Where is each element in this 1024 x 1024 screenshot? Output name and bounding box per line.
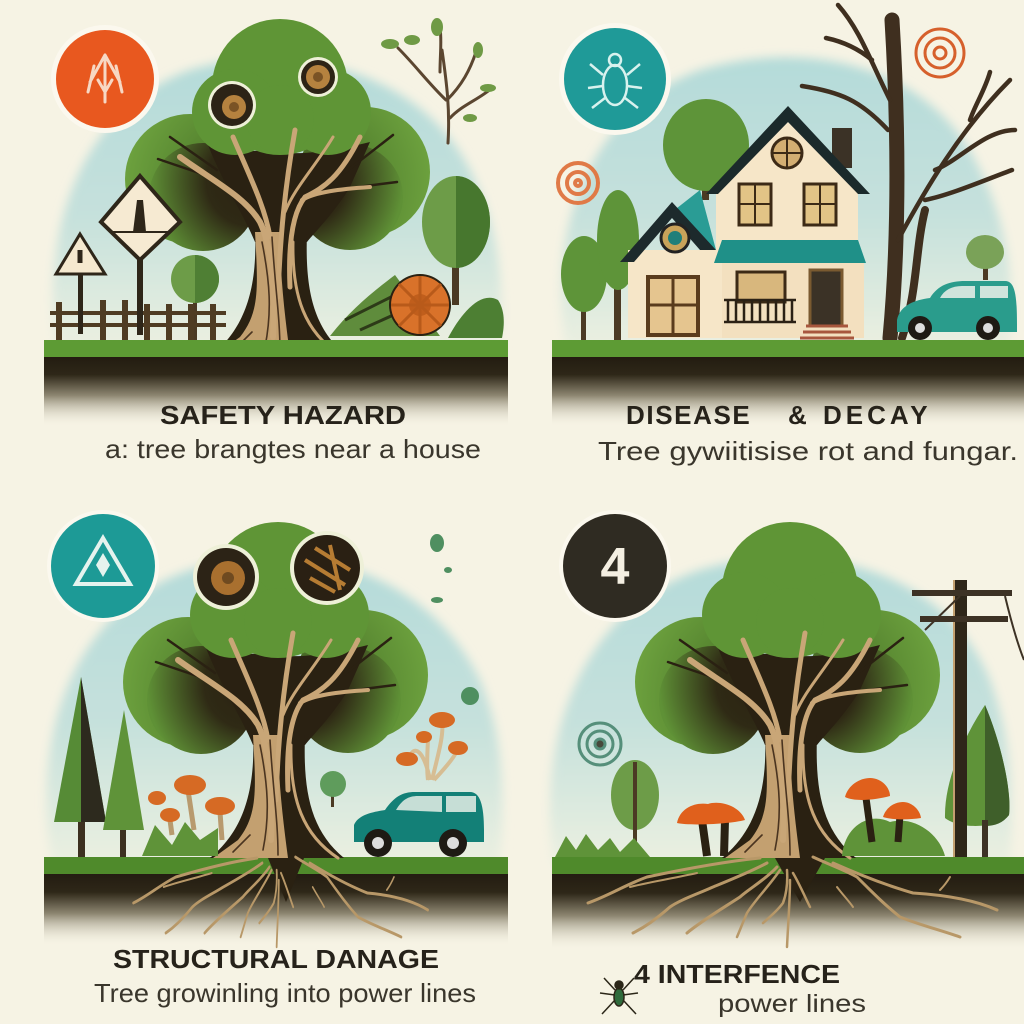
ground: [552, 857, 1024, 874]
panel: safety hazard: [44, 18, 508, 464]
panel: interference: [550, 510, 1024, 1018]
icon: spider: [600, 978, 638, 1014]
tree behind house: [663, 99, 749, 200]
mushroom cluster left: [142, 775, 235, 856]
heading: STRUCTURAL DANAGE: [113, 944, 439, 974]
panel: structural damage: [44, 510, 508, 1008]
tree hollow right: [298, 57, 338, 97]
utility pole: [912, 580, 1024, 858]
icon: target circle: [579, 723, 621, 765]
dead tree: [802, 5, 1015, 338]
small tree: [611, 760, 659, 858]
car: [897, 281, 1017, 340]
fence: [50, 300, 226, 340]
icon: target spiral: [916, 29, 964, 77]
tree hollow left: [193, 544, 259, 610]
icon: orange hazard badge: [51, 25, 159, 133]
soil: [552, 874, 1024, 950]
heading: &: [788, 400, 807, 430]
tree: large oak with roots: [123, 522, 428, 947]
sky backdrop: [53, 59, 502, 350]
tree hollow right: [290, 531, 364, 605]
cypress: [945, 705, 1009, 858]
icon: fungal spiral: [558, 163, 598, 203]
heading: SAFETY HAZARD: [160, 400, 406, 430]
heading: 4 INTERFENCE: [634, 959, 840, 989]
small sapling: [320, 771, 346, 807]
grass: [555, 834, 650, 857]
soil: [44, 874, 508, 946]
mushrooms right with shrub: [842, 778, 945, 856]
panel: disease and decay: [552, 5, 1024, 466]
tree: large oak with roots: [588, 522, 997, 947]
ground: [44, 340, 508, 357]
leaf sprigs: [430, 534, 479, 705]
caption: a: tree brangtes near a house: [105, 434, 481, 464]
small tree right: [966, 235, 1004, 280]
fallen log with shrubs: [330, 274, 504, 338]
tree hollow left: [208, 81, 256, 129]
mushrooms left: [677, 803, 745, 856]
icon: bare sapling: [381, 18, 496, 143]
caption: power lines: [718, 990, 866, 1018]
icon: teal insect badge: [559, 23, 671, 135]
icon: number four badge: [559, 510, 671, 622]
caption: Tree growinling into power lines: [94, 978, 476, 1008]
small round tree: [171, 255, 219, 340]
conifers: [54, 677, 144, 858]
car: [354, 792, 484, 857]
heading: DISEASE: [626, 400, 751, 430]
poplar trees: [561, 190, 639, 340]
icon: diamond warning sign: [101, 176, 180, 335]
ground: [552, 340, 1024, 357]
tree: large oak with hollows: [125, 19, 430, 355]
ground: [44, 857, 508, 874]
icon: number four badge: 4: [601, 538, 630, 596]
house: [620, 106, 870, 338]
sky backdrop: [550, 558, 1012, 866]
sky backdrop: [561, 57, 1012, 350]
icon: teal warning badge: [47, 510, 159, 622]
icon: small warning sign: [56, 234, 105, 334]
caption: Tree gywiitisise rot and fungar.: [598, 436, 1018, 466]
mushroom cluster right: [396, 712, 468, 780]
cypress tree: [422, 176, 490, 305]
soil: [44, 357, 508, 427]
soil: [552, 357, 1024, 427]
heading: DECAY: [823, 400, 932, 430]
sky backdrop: [46, 558, 503, 866]
